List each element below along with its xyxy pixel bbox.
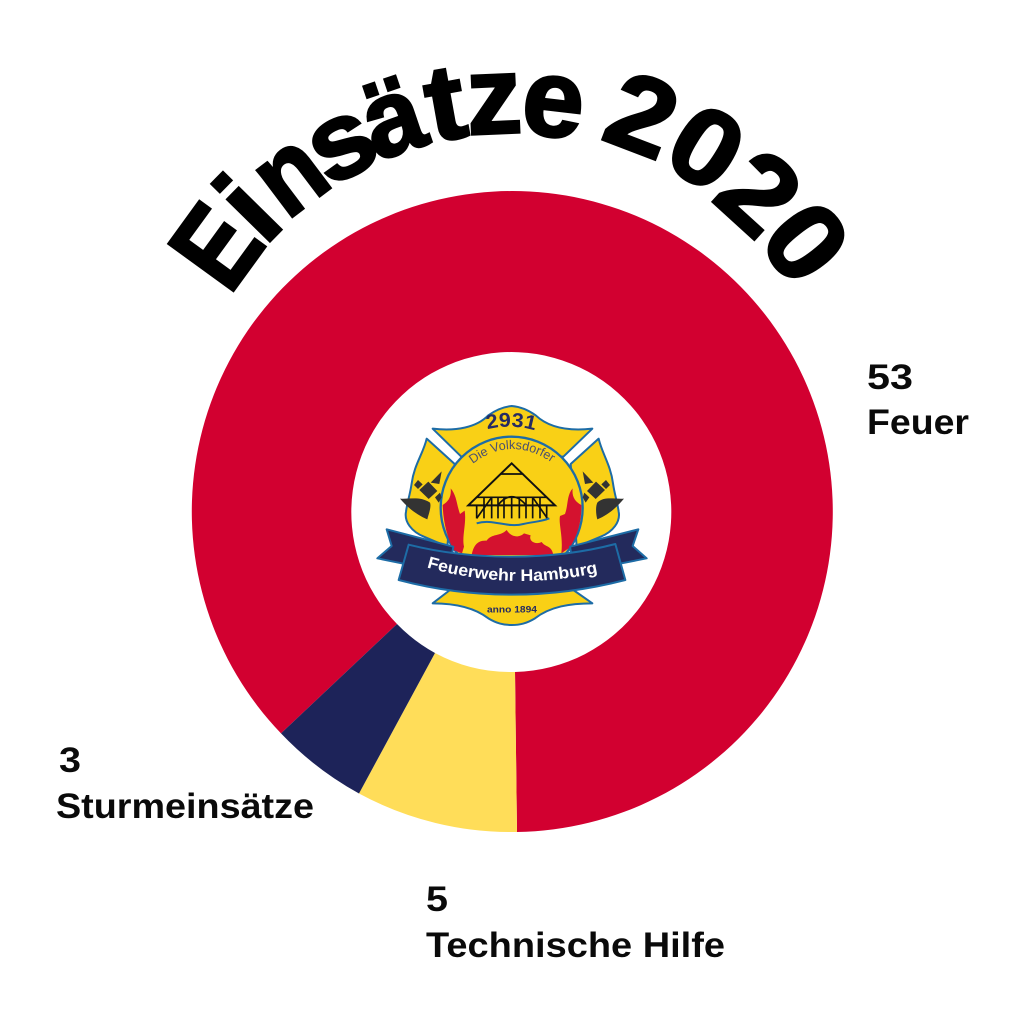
label: 53 Feuer xyxy=(867,358,969,442)
title: Einsätze 2020 on an arc: n xyxy=(227,105,350,240)
title: Einsätze 2020 on an arc: E xyxy=(144,182,288,311)
badge text anno 1894: anno 1894 xyxy=(487,605,538,615)
logo: Feuerwehr Hamburg badge xyxy=(376,405,648,626)
ribbon main banner xyxy=(399,544,625,595)
badge bottom shield xyxy=(433,590,592,625)
icon: left helmet xyxy=(400,471,442,519)
ribbon right tail xyxy=(570,529,647,567)
title: Einsätze 2020 on an arc xyxy=(144,33,874,311)
title: Einsätze 2020 on an arc: i xyxy=(193,153,304,264)
label: 53 Feuer: 53 xyxy=(867,358,913,397)
title: Einsätze 2020 on an arc: 0 xyxy=(647,79,765,216)
flames xyxy=(443,488,581,555)
label: 53 Feuer: Feuer xyxy=(867,403,969,442)
title: Einsätze 2020 on an arc: s xyxy=(284,73,396,208)
water line xyxy=(477,518,549,525)
ribbon left tail xyxy=(377,529,453,567)
badge text Die Volksdorfer: Die Volksdorfer xyxy=(468,440,556,464)
label: 3 Sturmeinsätze: Sturmeinsätze xyxy=(56,787,314,826)
label: 5 Technische Hilfe: 5 xyxy=(426,880,448,919)
segment: Sturmeinsätze 3 xyxy=(281,624,435,794)
badge top shield xyxy=(433,406,592,457)
title: Einsätze 2020 on an arc: 2 xyxy=(591,47,694,183)
title: Einsätze 2020 on an arc: 2 xyxy=(694,126,825,260)
ribbon text: Feuerwehr Hamburg xyxy=(428,556,597,581)
label: 5 Technische Hilfe xyxy=(426,880,725,965)
badge left wing xyxy=(406,439,455,547)
title: Einsätze 2020 on an arc: ä xyxy=(346,51,440,183)
label: 5 Technische Hilfe: Technische Hilfe xyxy=(426,926,725,965)
label: 3 Sturmeinsätze: 3 xyxy=(59,741,81,780)
badge right wing xyxy=(571,439,619,547)
label: 3 Sturmeinsätze xyxy=(56,741,314,826)
title: Einsätze 2020 on an arc: t xyxy=(415,40,475,165)
house: half-timbered farmhouse xyxy=(468,463,555,518)
title: Einsätze 2020 on an arc: z xyxy=(464,33,524,159)
title: Einsätze 2020 on an arc: e xyxy=(516,34,592,163)
segment: Feuer 53 xyxy=(192,191,833,832)
icon: right helmet xyxy=(583,471,624,519)
badge central circle xyxy=(441,437,583,579)
segment: Technische Hilfe 5 xyxy=(359,653,517,832)
badge number 2931: 2931 xyxy=(486,412,535,430)
title: Einsätze 2020 on an arc: 0 xyxy=(738,179,874,306)
donut chart xyxy=(192,191,833,832)
